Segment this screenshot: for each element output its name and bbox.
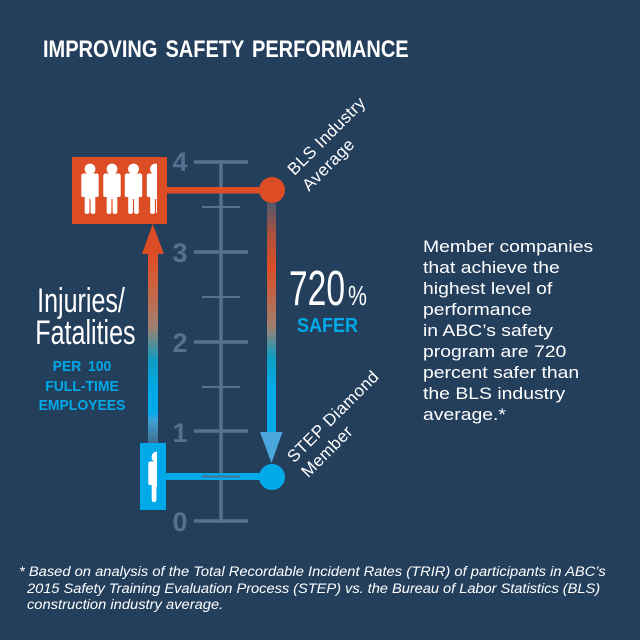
stat: 720% safer [289, 262, 367, 337]
text: injuries / fatalities: Injuries/ [37, 282, 124, 320]
arrow: down from industry to member [260, 203, 282, 463]
axis numbers: 1 [172, 418, 188, 448]
label: STEP Diamond Member: STEP Diamond [283, 367, 383, 466]
axis numbers [172, 147, 188, 537]
text: per 100 full-time employees: FULL-TIME [45, 378, 119, 394]
footnote [19, 564, 606, 612]
axis numbers: 0 [172, 507, 188, 537]
label: BLS Industry Average: Average [298, 135, 358, 195]
marker: STEP Diamond member [165, 464, 285, 490]
axis numbers: 4 [172, 147, 188, 177]
text: description: percent safer than [423, 363, 579, 382]
arrow: up from member to industry [142, 224, 164, 443]
text: description: highest level of [423, 279, 552, 298]
text: description: Member companies [423, 237, 593, 256]
stat: 720% safer: % [348, 280, 367, 311]
footnote: construction industry average. [27, 597, 223, 612]
footnote: 2015 Safety Training Evaluation Process (STEP) vs. the Bureau of Labor Statistics (BLS) [27, 580, 600, 596]
marker: BLS industry average [166, 177, 285, 203]
label: STEP Diamond Member: Member [297, 422, 357, 481]
chart: safety performance scale [72, 98, 379, 532]
text: description: in ABC’s safety [423, 321, 553, 340]
axis numbers: 2 [172, 328, 188, 358]
text: injuries / fatalities [35, 282, 135, 352]
title: IMPROVING SAFETY PERFORMANCE [43, 36, 409, 63]
icon: orange box with people [72, 157, 167, 224]
text: per 100 full-time employees [39, 358, 125, 414]
axis numbers: 3 [172, 238, 188, 268]
text: per 100 full-time employees: EMPLOYEES [39, 397, 125, 414]
label: BLS Industry Average: BLS Industry [284, 93, 370, 179]
footnote: * Based on analysis of the Total Recordable Incident Rates (TRIR) of participants in ABC’s [19, 564, 606, 579]
text: description [423, 237, 593, 424]
axis [194, 160, 248, 523]
text: description: that achieve the [423, 258, 560, 277]
stat: 720% safer: SAFER [297, 315, 358, 337]
text: description: average.* [423, 405, 506, 424]
text: description: program are 720 [423, 342, 566, 361]
icon: blue box with person [140, 443, 166, 510]
text: per 100 full-time employees: PER 100 [53, 358, 111, 375]
text: description: performance [423, 300, 532, 319]
stat: 720% safer: 720 [289, 262, 345, 316]
text: description: the BLS industry [423, 384, 565, 403]
text: injuries / fatalities: Fatalities [35, 314, 135, 352]
